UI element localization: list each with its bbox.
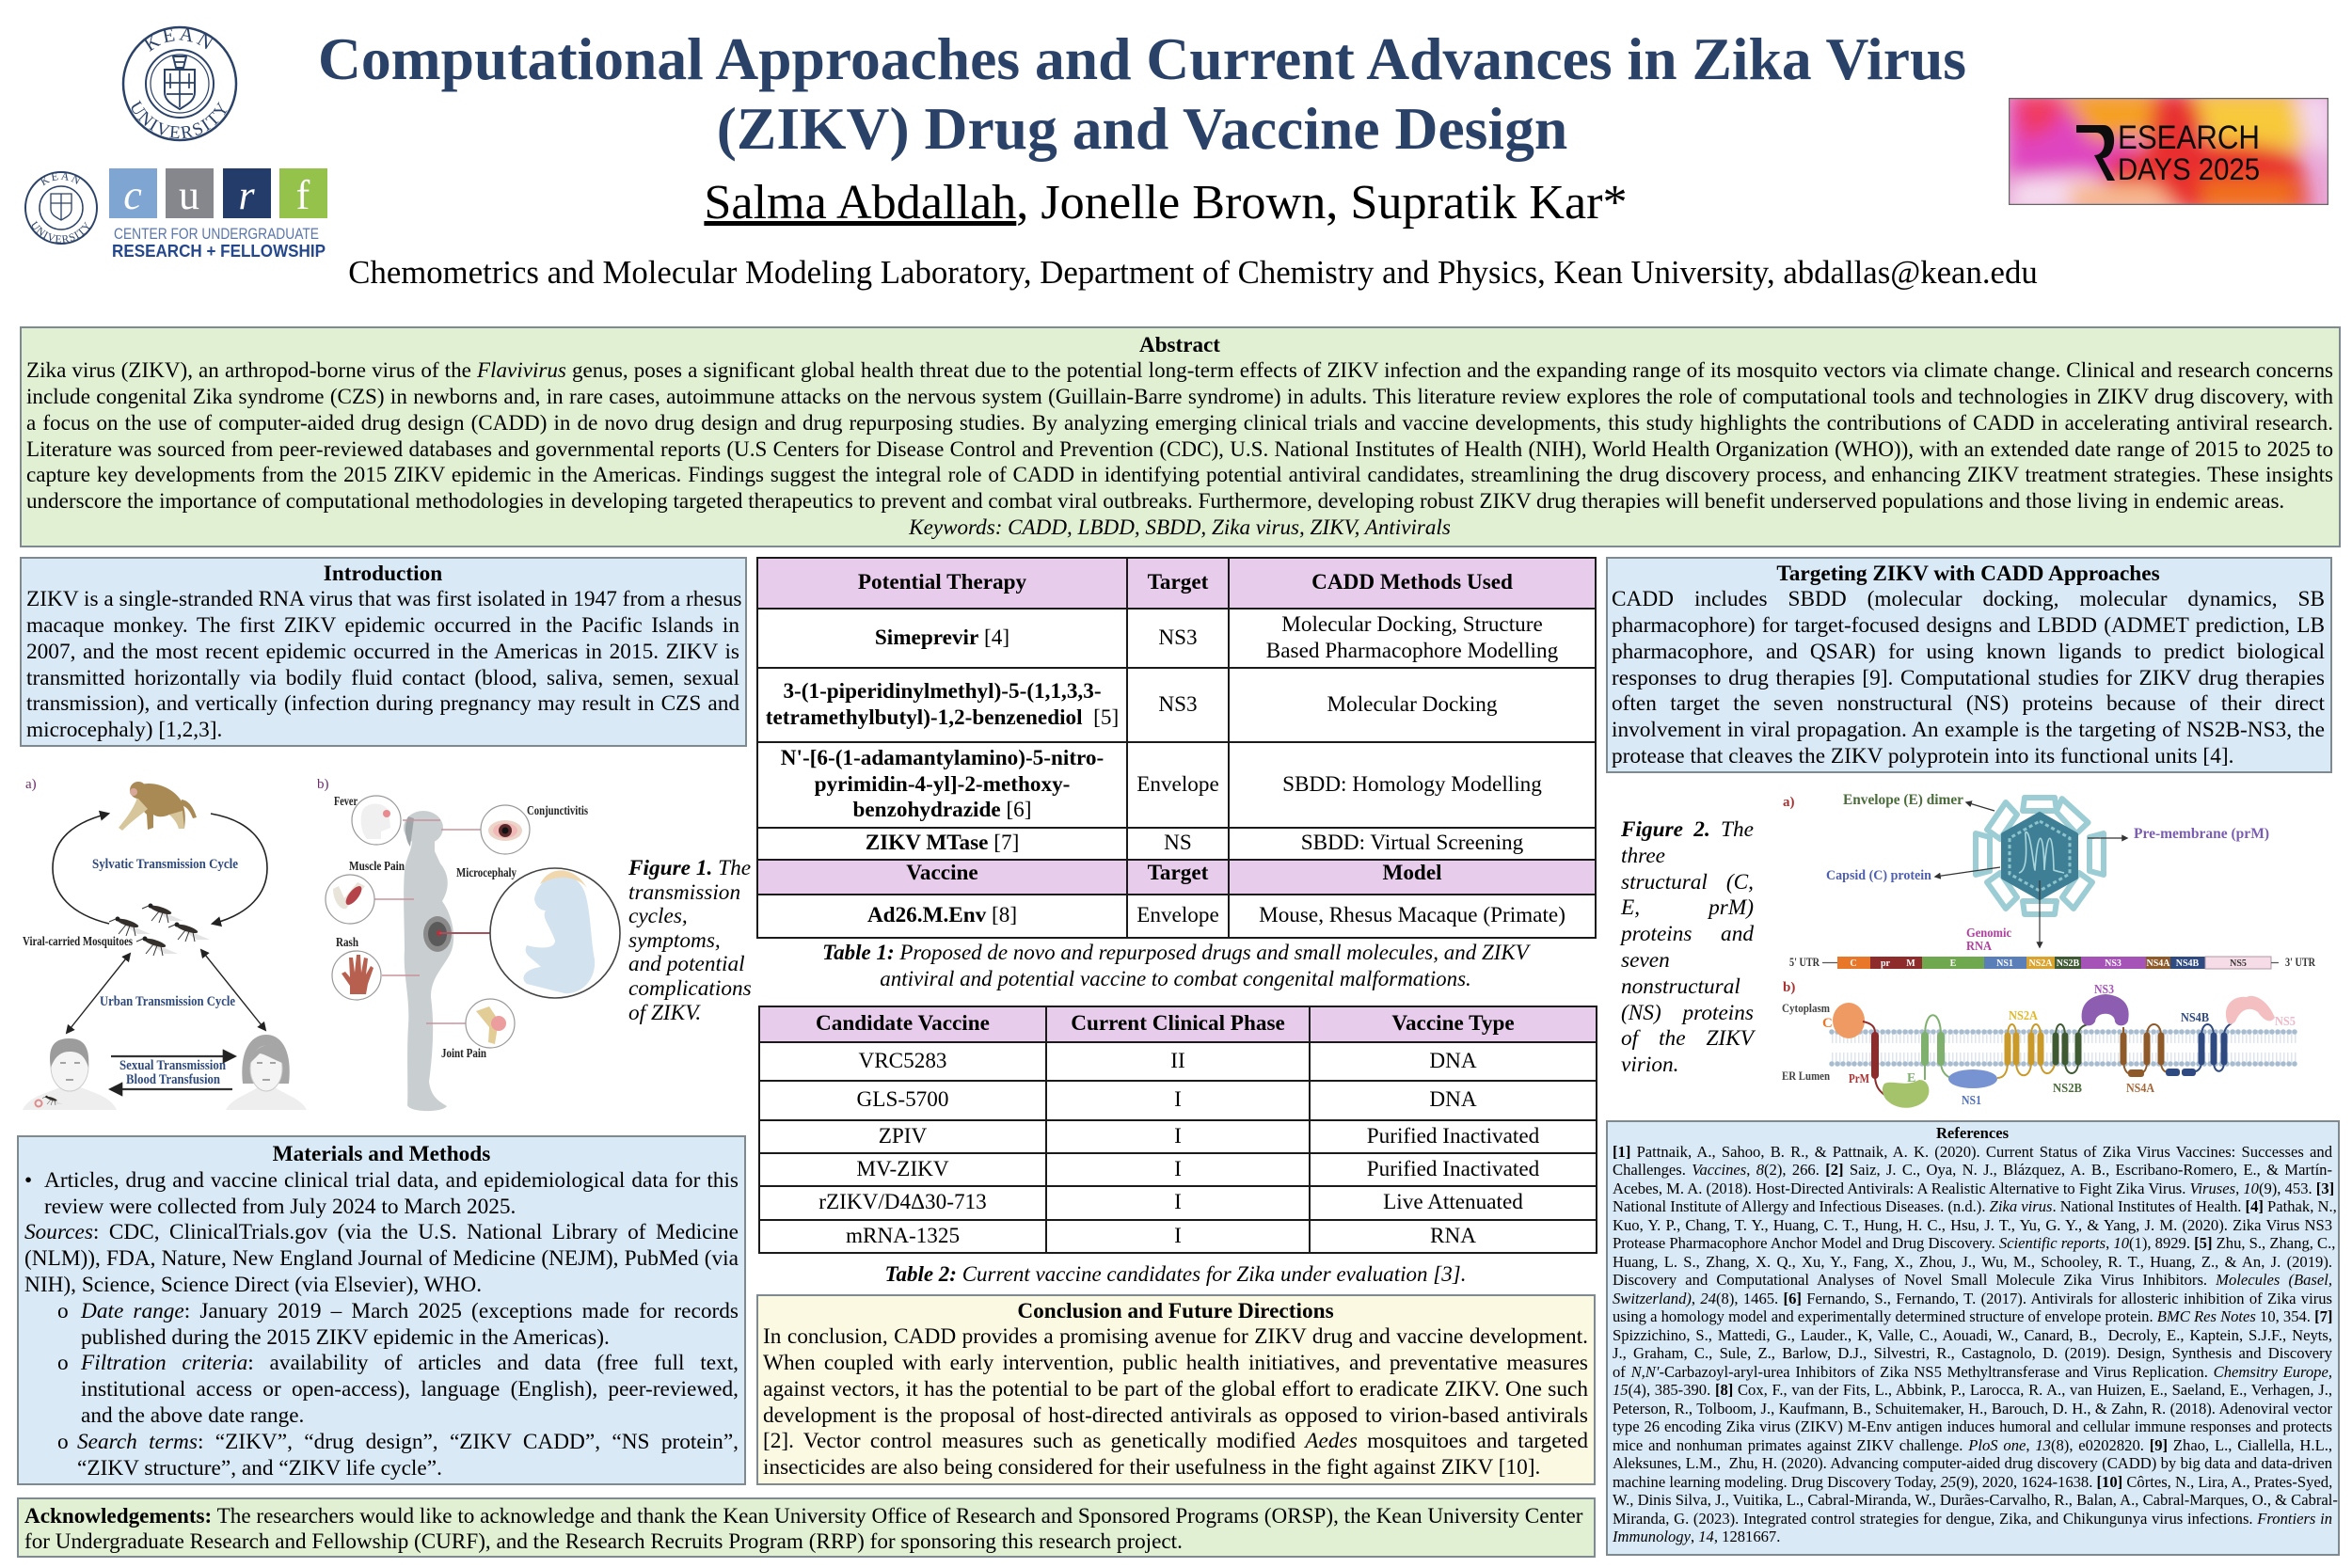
references text: using a homology model and experimentally determined structure of envelope protein. BMC Res Notes 10, 354. [7]	[1613, 1307, 2332, 1325]
human: woman	[226, 1035, 307, 1110]
human: man	[23, 1038, 117, 1110]
table 2: vaccine candidates: RNA	[1430, 1224, 1476, 1248]
genome bar: NS2A	[2028, 958, 2053, 969]
conclusion text	[763, 1324, 1588, 1480]
figure 1: transmission cycles and symptoms	[23, 777, 621, 1112]
table 1: potential therapies: CADD Methods Used	[1311, 570, 1513, 594]
table 2: vaccine candidates: Live Attenuated	[1383, 1190, 1523, 1214]
references text: Huang, L. S., Zhang, X. Q., Xu, Y., Fang, X., Zhou, J., Wu, M., Schooley, R. T., Huang, Z., & An, J. (2019).	[1613, 1253, 2332, 1270]
references text: Discovery and Computational Analyses of Novel Small Molecule Zika Virus Inhibitors. Molecules (Basel,	[1613, 1271, 2332, 1289]
table 1: potential therapies: Target	[1148, 861, 1208, 885]
references text: J., Graham, C., Sule, Z., Barlow, D.J., Silvestri, R., Castagnolo, D. (2019). Design, Synthesis and Discovery	[1613, 1344, 2332, 1362]
references text: Peterson, R., Tolboom, J., Kaufmann, B., Schuitemaker, H., Barouch, D. H., & Zahn, R. (2018). Adenoviral vector	[1613, 1400, 2332, 1417]
table 2: vaccine candidates: MV-ZIKV	[856, 1157, 949, 1181]
symptom labels: Muscle Pain	[349, 860, 405, 874]
table 2: vaccine candidates: Purified Inactivated	[1367, 1124, 1539, 1148]
panel: introduction	[20, 557, 747, 747]
table 1: potential therapies: pyrimidin-4-yl]-2-methoxy-	[815, 772, 1070, 797]
arrows: virion callouts	[1966, 802, 1994, 811]
urban label: Urban Transmission Cycle	[100, 994, 235, 1009]
protein: NS5	[2226, 996, 2275, 1024]
tile u: u	[179, 172, 199, 218]
conclusion heading: Conclusion and Future Directions	[1017, 1298, 1334, 1323]
genome bar: M	[1906, 958, 1915, 969]
introduction heading: Introduction	[324, 561, 442, 585]
tile f: f	[296, 172, 310, 218]
genome bar	[1837, 957, 2271, 969]
abstract text: capture key developments from the 2015 ZIKV epidemic in the Americas. Findings suggest the integral role of CADD in identifying potential antiviral candidates, streamlining the drug discovery process, and enhancing ZIKV treatment strategies. These insights	[26, 462, 2333, 486]
references text: [1] Pattnaik, A., Sahoo, B. R., & Pattnaik, A. K. (2020). Current Status of Zika Virus Vaccines: Successes and	[1613, 1142, 2332, 1161]
table 1 caption: antiviral and potential vaccine to combat congenital malformations.	[880, 967, 1471, 990]
protein: C	[1833, 1003, 1865, 1038]
authors: Salma Abdallah, Jonelle Brown, Supratik Kar*	[704, 175, 1628, 230]
sexual transmission label: Sexual Transmission	[119, 1058, 227, 1073]
table 1: potential therapies: N'-[6-(1-adamantylamino)-5-nitro-	[781, 746, 1104, 770]
protein labels: NS4B	[2181, 1011, 2209, 1025]
table 1: potential therapies: Mouse, Rhesus Macaque (Primate)	[1259, 903, 1565, 927]
tile r: r	[238, 172, 255, 218]
introduction text: transmission), and vertically (infection during pregnancy may result in CZS and	[26, 691, 739, 716]
references text	[1613, 1142, 2338, 1545]
protein: NS2A	[1997, 1024, 2056, 1078]
affiliation: Chemometrics and Molecular Modeling Laboratory, Department of Chemistry and Physics, Kean University, abdallas@kean.edu	[348, 254, 2038, 291]
table 2: vaccine candidates	[758, 1006, 1597, 1254]
logo: Kean seal and CURF	[24, 168, 327, 261]
references text: Spizzichino, S., Mattedi, G., Lauder., K, Valle, C., Aouadi, W., Canard, B., Decroly, E., Kaptein, S.J.F., Neyts,	[1613, 1326, 2332, 1343]
table 1: potential therapies: Vaccine	[906, 861, 978, 885]
arrow: mosquito to human left	[67, 954, 130, 1033]
protein labels: NS2A	[2009, 1009, 2039, 1023]
introduction text: ZIKV is a single-stranded RNA virus that was first isolated in 1947 from a rhesus	[26, 587, 741, 611]
table 1 caption: Table 1: Proposed de novo and repurposed drugs and small molecules, and ZIKV	[822, 941, 1529, 964]
references heading: References	[1936, 1124, 2009, 1142]
arrow: sylvatic left arc	[53, 814, 109, 924]
protein: NS4B	[2166, 1023, 2232, 1076]
table 1: potential therapies: Based Pharmacophore Modelling	[1266, 638, 1558, 662]
tile c	[109, 168, 157, 218]
figure 1 caption: cycles,	[628, 904, 688, 928]
targeting text: CADD includes SBDD (molecular docking, molecular dynamics, SB	[1612, 587, 2325, 611]
symptom labels	[334, 795, 588, 1061]
table 1: potential therapies: Simeprevir [4]	[875, 626, 1009, 650]
references text: machine learning modeling. Drug Discovery Today, 25(9), 2020, 1624-1638. [10] Côrtes, N., Lira, A., Prates-Syed,	[1613, 1473, 2332, 1490]
abstract text: a focus on the use of computer-aided drug design (CADD) in de novo drug design and drug repurposing studies. By analyzing emerging clinical trials and vaccine developments, this study highlights the contributions of CADD in accelerating antiviral research.	[26, 410, 2333, 435]
conclusion text: against vectors, it has the potential to be part of the global effort to eradicate ZIKV. One such	[763, 1377, 1588, 1402]
conclusion text: When coupled with early intervention, public health initiatives, and preventative measures	[763, 1351, 1588, 1375]
table 1: potential therapies: Envelope	[1136, 772, 1219, 797]
protein: NS2B	[2056, 1023, 2090, 1073]
figure 2 caption: proteins and	[1621, 922, 1754, 946]
figure 1 caption: Figure 1. The	[628, 856, 751, 880]
label pre-membrane: Pre-membrane (prM)	[2134, 826, 2269, 842]
filtration criteria	[57, 1351, 739, 1428]
table 2: vaccine candidates: rZIKV/D4Δ30-713	[818, 1190, 987, 1214]
table 1: potential therapies: Ad26.M.Env [8]	[867, 903, 1017, 927]
panel: acknowledgements: Acknowledgements: The researchers would like to acknowledge and thank the Kean University Office of Research and Sponsored Programs (ORSP), the Kean University Center	[24, 1503, 1582, 1528]
references text: Miranda, G. (2023). Integrated control strategies for dengue, Zika, and Chikungunya virus infections. Frontiers in	[1613, 1509, 2332, 1528]
symptom labels: Conjunctivitis	[527, 804, 588, 818]
panel: targeting ZIKV with CADD approaches	[1606, 557, 2332, 773]
banner R	[2076, 125, 2115, 181]
symptom: fever	[352, 796, 401, 845]
table 2: vaccine candidates: Current Clinical Phase	[1071, 1011, 1285, 1036]
label capsid: Capsid (C) protein	[1826, 868, 1932, 883]
abstract text: include congenital Zika syndrome (CZS) in newborns and, in rare cases, autoimmune attacks on the nervous system (Guillain-Barre syndrome) in adults. This literature review explores the role of computational tools and technologies in ZIKV drug discovery, with	[26, 384, 2333, 408]
symptom labels: Microcephaly	[456, 866, 516, 880]
title	[318, 24, 1966, 162]
figure 2 caption: structural (C,	[1621, 870, 1754, 895]
abstract text: Zika virus (ZIKV), an arthropod-borne virus of the Flavivirus genus, poses a significant global health threat due to the potential long-term effects of ZIKV infection and the expanding range of its mosquito vectors via climate change. Clinical and research concerns	[26, 357, 2333, 382]
panel: abstract	[20, 326, 2341, 547]
labels cytoplasm and lumen: Cytoplasm	[1782, 1001, 1830, 1015]
figure 2 caption: seven	[1621, 948, 1670, 973]
materials sources: (NLM)), FDA, Nature, New England Journal of Medicine (NEJM), PubMed (via	[24, 1246, 739, 1271]
filtration criteria: Filtration criteria: availability of articles and data (free full text,	[81, 1351, 739, 1375]
complication: microcephaly fetus	[490, 868, 620, 998]
figure 1 caption: transmission	[628, 880, 740, 905]
labels cytoplasm and lumen	[1782, 1001, 1831, 1083]
references text: Acebes, M. A. (2018). Host-Directed Antivirals: A Realistic Alternative to Fight Zika Virus. Viruses, 10(9), 453. [3]	[1613, 1180, 2334, 1196]
table 2: vaccine candidates: GLS-5700	[857, 1087, 948, 1112]
figure 2 caption: virion.	[1621, 1053, 1678, 1077]
references text: Aleksunes, L.M., Zhu, H. (2020). Advancing computer-aided drug discovery (CADD) by big data and data-driven	[1613, 1454, 2332, 1472]
body silhouette	[404, 811, 453, 1111]
introduction text: 2007, and the most recent epidemic occurred in the Americas in 2015. ZIKV is	[26, 640, 739, 664]
panel: conclusion and future directions	[756, 1294, 1596, 1485]
label genomic RNA: Genomic	[1966, 927, 2011, 941]
panel: acknowledgements: for Undergraduate Research and Fellowship (CURF), and the Research Recruits Program (RRP) for sponsoring this research project.	[24, 1529, 1183, 1554]
protein labels: NS5	[2275, 1015, 2296, 1029]
table 2 caption: Table 2: Current vaccine candidates for Zika under evaluation [3].	[885, 1262, 1466, 1286]
label b: b)	[1783, 980, 1795, 995]
figure 1 caption: and potential	[628, 952, 745, 976]
references text: Switzerland), 24(8), 1465. [6] Fernando, S., Fernando, T. (2017). Antivirals for allosteric inhibition of Zika virus	[1613, 1289, 2332, 1307]
symptom: joint pain	[466, 999, 515, 1048]
table 2: vaccine candidates: I	[1174, 1157, 1182, 1181]
abstract text	[26, 357, 2333, 513]
protein labels: NS1	[1962, 1094, 1981, 1108]
materials bullet: •	[24, 1168, 32, 1193]
table 2: vaccine candidates: I	[1174, 1124, 1182, 1148]
table 2: vaccine candidates: I	[1174, 1224, 1182, 1248]
targeting text: protease that cleaves the ZIKV polyprotein into its functional units [4].	[1612, 744, 2233, 768]
symptom: muscle pain	[326, 875, 374, 924]
protein: E	[1883, 1015, 1953, 1108]
table 1 caption	[822, 941, 1531, 990]
table 1: potential therapies: Model	[1382, 861, 1442, 885]
protein: PrM	[1863, 1022, 1884, 1095]
protein: NS4A	[2123, 1024, 2168, 1077]
label a: a)	[1783, 795, 1795, 810]
table 1: potential therapies: Molecular Docking	[1327, 692, 1497, 717]
conclusion text: In conclusion, CADD provides a promising avenue for ZIKV drug and vaccine development.	[763, 1324, 1588, 1349]
table 2: vaccine candidates: mRNA-1325	[846, 1224, 960, 1248]
table 2: vaccine candidates: Purified Inactivated	[1367, 1157, 1539, 1181]
table 2: vaccine candidates: Candidate Vaccine	[816, 1011, 990, 1036]
panel: materials and methods	[17, 1135, 746, 1485]
table 1: potential therapies: NS3	[1158, 692, 1198, 717]
table 1: potential therapies: NS	[1164, 831, 1192, 855]
date range: o	[57, 1299, 69, 1323]
viral-carried mosquitoes label: Viral-carried Mosquitoes	[23, 935, 133, 949]
abstract heading: Abstract	[1139, 331, 1220, 356]
protein labels: NS3	[2094, 983, 2114, 997]
targeting text: often target the seven nonstructural (NS) proteins because of their direct	[1612, 691, 2325, 716]
small seal	[24, 171, 98, 245]
mosquitoes	[109, 903, 210, 956]
sylvatic label: Sylvatic Transmission Cycle	[92, 857, 238, 872]
conclusion text: development is the proposal of host-directed antivirals as opposed to virion-based antivirals	[763, 1403, 1588, 1428]
tile r	[223, 168, 271, 218]
symptom: rash	[332, 951, 381, 1000]
protein labels: NS4A	[2126, 1082, 2155, 1096]
symptom labels: Rash	[336, 936, 358, 950]
figure 1 caption	[628, 856, 752, 1025]
table 1: potential therapies: NS3	[1158, 626, 1198, 650]
table 1: potential therapies: Molecular Docking, Structure	[1281, 612, 1543, 637]
targeting heading: Targeting ZIKV with CADD Approaches	[1776, 561, 2160, 585]
label envelope: Envelope (E) dimer	[1843, 792, 1963, 808]
genome bar: NS4A	[2146, 958, 2170, 969]
table 1: potential therapies: benzohydrazide [6]	[852, 798, 1031, 822]
title: Computational Approaches and Current Advances in Zika Virus	[318, 24, 1966, 92]
targeting text: responses to drug therapies [9]. Computational studies for ZIKV drug therapies	[1612, 666, 2325, 690]
arrow: sexual transmission	[111, 1055, 234, 1057]
search terms: o	[57, 1430, 69, 1454]
figure 2 caption: of the ZIKV	[1621, 1026, 1754, 1051]
arrow: mosquito to human right	[201, 950, 265, 1030]
banner text line 2: DAYS 2025	[2118, 152, 2260, 186]
figure 2: ZIKV virion, genome and membrane topology	[1782, 792, 2316, 1108]
connector lines	[374, 820, 481, 1023]
genome ends: 5' UTR	[1789, 955, 1820, 969]
blood transfusion label: Blood Transfusion	[126, 1072, 221, 1087]
table 1: potential therapies	[756, 557, 1597, 939]
lipid membrane	[1832, 1032, 2297, 1064]
targeting text: involvement in viral propagation. An example is the targeting of NS2B-NS3, the	[1612, 718, 2325, 742]
genome bar: pr	[1881, 958, 1891, 969]
date range	[57, 1299, 739, 1350]
conclusion text: [2]. Vector control measures such as genetically modified Aedes mosquitoes and targeted	[763, 1429, 1588, 1453]
genome bar: NS1	[1996, 958, 2013, 969]
protein labels: C	[1822, 1016, 1833, 1031]
introduction text: microcephaly) [1,2,3].	[26, 718, 222, 742]
search terms: Search terms: “ZIKV”, “drug design”, “ZIKV CADD”, “NS protein”,	[77, 1430, 739, 1454]
targeting text: pharmacophore, and QSAR) for using known ligands to predict biological	[1612, 640, 2325, 664]
table 2: vaccine candidates: DNA	[1429, 1049, 1477, 1073]
genome bar: E	[1950, 958, 1957, 969]
materials bullet	[24, 1168, 739, 1219]
logo: Kean University seal: KEAN	[145, 28, 213, 52]
filtration criteria: o	[57, 1351, 69, 1375]
figure 1 caption: of ZIKV.	[628, 1001, 701, 1025]
search terms: “ZIKV structure”, and “ZIKV life cycle”.	[77, 1456, 442, 1481]
introduction text	[26, 587, 741, 742]
figure 2 caption: Figure 2. The	[1621, 817, 1754, 842]
keywords: Keywords: CADD, LBDD, SBDD, Zika virus, ZIKV, Antivirals	[909, 515, 1451, 539]
date range: published during the 2015 ZIKV epidemic in the Americas).	[81, 1325, 610, 1350]
abstract text: underscore the importance of computational methodologies in developing targeted therapeutics to prevent and combat viral outbreaks. Furthermore, developing robust ZIKV drug therapies will benefit underserved populations and those living in endemic areas.	[26, 488, 2284, 513]
title: (ZIKV) Drug and Vaccine Design	[717, 94, 1567, 162]
targeting text	[1612, 587, 2325, 768]
table 1: potential therapies: ZIKV MTase [7]	[866, 831, 1019, 855]
figure 2 caption: (NS) proteins	[1621, 1001, 1754, 1025]
labels cytoplasm and lumen: ER Lumen	[1782, 1069, 1831, 1083]
date range: Date range: January 2019 – March 2025 (exceptions made for records	[81, 1299, 739, 1323]
table 2: vaccine candidates: Vaccine Type	[1391, 1011, 1515, 1036]
table 2: vaccine candidates: DNA	[1429, 1087, 1477, 1112]
protein labels: PrM	[1849, 1072, 1869, 1086]
materials sources: NIH), Science, Science Direct (via Elsevier), WHO.	[24, 1273, 482, 1297]
table 2: vaccine candidates: VRC5283	[858, 1049, 947, 1073]
table 1: potential therapies: 3-(1-piperidinylmethyl)-5-(1,1,3,3-	[783, 679, 1102, 704]
references text: Protease Pharmacophore Anchor Model and Drug Discovery. Scientific reports, 10(1), 8929. [5] Zhu, S., Zhang, C.,	[1613, 1234, 2335, 1252]
filtration criteria: institutional access or open-access), language (English), peer-reviewed,	[81, 1377, 739, 1402]
symptom: conjunctivitis	[481, 805, 530, 854]
panel: references	[1606, 1120, 2340, 1556]
materials heading: Materials and Methods	[273, 1142, 490, 1166]
targeting text: pharmacophore) for target-focused designs and LBDD (ADMET prediction, LB	[1612, 613, 2325, 638]
genome bar: NS3	[2105, 958, 2122, 969]
logo: Research Days 2025 banner	[2009, 98, 2328, 205]
references text: Challenges. Vaccines, 8(2), 266. [2] Saiz, J. C., Oya, N. J., Blázquez, A. B., Escribano-Romero, E., & Martín-	[1613, 1161, 2332, 1179]
materials sources: Sources: CDC, ClinicalTrials.gov (via the U.S. National Library of Medicine	[24, 1220, 739, 1244]
small seal: UNIVERSITY	[32, 220, 90, 243]
table 2: vaccine candidates: II	[1170, 1049, 1185, 1073]
table 2: vaccine candidates: I	[1174, 1190, 1182, 1214]
table 1: potential therapies: Target	[1148, 570, 1208, 594]
materials bullet: review were collected from July 2024 to March 2025.	[44, 1195, 516, 1219]
label a: a)	[25, 777, 37, 792]
genome bar: NS5	[2230, 958, 2247, 969]
logo: Kean University seal	[122, 26, 237, 141]
references text: Immunology, 14, 1281667.	[1613, 1528, 1780, 1545]
label genomic RNA line 2: RNA	[1966, 940, 1993, 954]
curf text line 2: RESEARCH + FELLOWSHIP	[112, 242, 326, 261]
search terms	[57, 1430, 739, 1481]
conclusion text: insecticides are also being considered for their usefulness in the fight against ZIKV [10].	[763, 1455, 1540, 1480]
figure 2 caption	[1620, 817, 1756, 1077]
tile u	[166, 168, 214, 218]
genome bar: NS2B	[2057, 958, 2080, 969]
references text: of N,N'-Carbazoyl-aryl-urea Inhibitors of Zika NS5 Methyltransferase and Virus Replication. Chemsitry Europe,	[1613, 1362, 2332, 1381]
protein labels: NS2B	[2053, 1082, 2082, 1096]
references text: National Institute of Allergy and Infectious Diseases. (n.d.). Zika virus. National Institutes of Health. [4] Pathak, N.,	[1613, 1197, 2337, 1215]
protein: NS1	[1948, 1069, 1997, 1088]
table 2: vaccine candidates: I	[1174, 1087, 1182, 1112]
materials bullet: Articles, drug and vaccine clinical trial data, and epidemiological data for this	[44, 1168, 739, 1193]
abstract text: Literature was sourced from peer-reviewed databases and governmental reports (U.S Centers for Disease Control and Prevention (CDC), U.S. National Institutes of Health (NIH), World Health Organization (WHO)), with an extended date range of 2015 to 2025 to	[26, 436, 2333, 461]
figure 2 caption: E, prM)	[1621, 895, 1754, 920]
table 1: potential therapies: tetramethylbutyl)-1,2-benzenediol [5]	[766, 705, 1119, 730]
genome ends	[1789, 955, 2315, 969]
panel: acknowledgements	[17, 1497, 1596, 1558]
table 1: potential therapies: Envelope	[1136, 903, 1219, 927]
references text: Kuo, Y. P., Chang, T. Y., Huang, C. T., Hung, H. C., Hsu, J. T., Yu, G. Y., & Yang, J. M. (2020). Zika Virus NS3	[1613, 1215, 2332, 1234]
figure 2 caption: nonstructural	[1621, 974, 1740, 999]
virion	[1976, 796, 2104, 914]
figure 1 caption: symptoms,	[628, 928, 721, 953]
references text: type 26 encoding Zika virus (ZIKV) M-Env antigen induces humoral and cellular immune responses and protects	[1613, 1418, 2332, 1435]
tile f	[279, 168, 327, 218]
genome bar: C	[1850, 958, 1857, 969]
table 1: potential therapies: SBDD: Homology Modelling	[1282, 772, 1542, 797]
references text: mice and nonhuman primates against ZIKV challenge. PloS one, 13(8), e0202820. [9] Zhao, L., Ciallella, H.L.,	[1613, 1435, 2332, 1454]
genome ends: 3' UTR	[2285, 955, 2315, 969]
introduction text: macaque monkey. The first ZIKV epidemic occurred in the Pacific Islands in	[26, 613, 739, 638]
references text: W., Dinis Silva, J., Vuitika, L., Cabral-Miranda, W., Durães-Carvalho, R., Balan, A., Cabral-Marques, O., & Cabral-	[1613, 1491, 2338, 1509]
icon: monkey	[119, 782, 197, 831]
protein labels	[1822, 983, 2296, 1108]
arrow: sylvatic right arc	[211, 814, 267, 924]
label b: b)	[317, 777, 329, 792]
table 1: potential therapies: Potential Therapy	[858, 570, 1026, 594]
filtration criteria: and the above date range.	[81, 1403, 304, 1428]
symptom labels: Fever	[334, 795, 358, 809]
protein: NS3	[2082, 994, 2129, 1025]
figure 1 caption: complications	[628, 976, 752, 1001]
banner text line 1: ESEARCH	[2118, 119, 2260, 156]
arrow: blood transfusion	[111, 1088, 232, 1090]
genome bar: NS4B	[2176, 958, 2200, 969]
introduction text: transmitted horizontally via bodily fluid contact (blood, saliva, semen, sexual	[26, 666, 739, 690]
references text: 15(4), 385-390. [8] Cox, F., van der Fits, L., Abbink, P., Larocca, R. A., van Huizen, E., Saeland, E., Verhagen, J.,	[1613, 1381, 2332, 1399]
table 1: potential therapies: SBDD: Virtual Screening	[1301, 831, 1523, 855]
protein labels: E	[1907, 1071, 1915, 1085]
table 2: vaccine candidates: ZPIV	[879, 1124, 927, 1148]
small seal: KEAN	[41, 173, 80, 186]
materials sources	[24, 1220, 739, 1297]
figure 2 caption: three	[1621, 844, 1665, 868]
logo: Kean University seal: UNIVERSITY	[132, 100, 228, 139]
tile c: c	[123, 172, 142, 218]
symptom labels: Joint Pain	[441, 1047, 486, 1061]
